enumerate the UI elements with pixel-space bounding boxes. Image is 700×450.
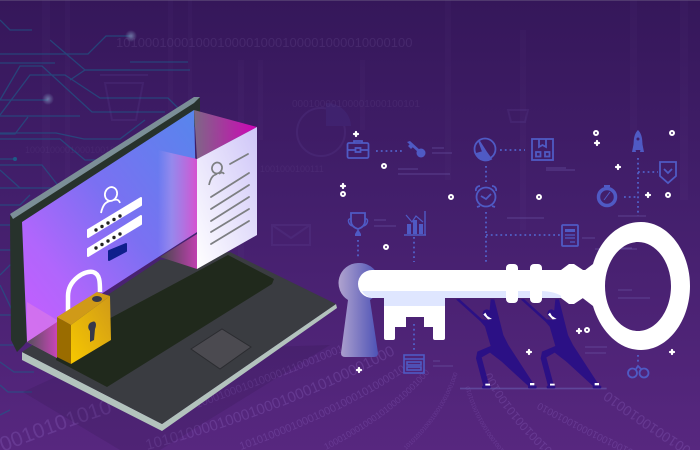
icon network [341, 130, 676, 378]
person 1 [456, 299, 537, 388]
lock cylinder [92, 296, 102, 302]
icon: binoculars [628, 366, 648, 378]
login user icon [101, 185, 120, 213]
binary data streams: 1000100010100001110001000111001 [198, 346, 342, 408]
dotted connectors [358, 150, 658, 363]
key bit [384, 298, 445, 340]
document text lines [211, 154, 249, 244]
screen glow [158, 150, 197, 257]
icon: box [532, 139, 553, 160]
lid top edge [10, 97, 200, 219]
key collars [506, 264, 518, 303]
key diamond neck [561, 264, 596, 304]
keyhole [339, 263, 380, 357]
lock front [71, 296, 111, 364]
icon: bar chart [404, 211, 426, 235]
icon: pie chart [474, 138, 496, 160]
faint top binary strings: 010 [205, 123, 258, 159]
icon: key [407, 141, 426, 158]
circuit nodes [13, 30, 137, 161]
faint top binary strings [25, 35, 420, 174]
icon: stopwatch [598, 186, 616, 206]
plus sparkles [341, 132, 674, 372]
laptop lid frame [10, 97, 200, 352]
keyhole [88, 322, 96, 342]
laptop [10, 97, 337, 450]
icon: browser [404, 355, 424, 373]
login form [88, 185, 141, 260]
username field [88, 198, 141, 237]
document user icon [209, 161, 224, 185]
icon: trophy [348, 213, 368, 236]
shackle [68, 272, 100, 317]
faint top binary strings: 1001000100111 [260, 164, 324, 174]
lock top [57, 292, 110, 325]
screen [22, 110, 197, 342]
icon: alarm clock [476, 186, 496, 207]
binary data streams: 1000100010001010001000100010001 [324, 370, 428, 450]
ring dots [341, 131, 674, 332]
laptop shadow [23, 345, 330, 450]
icon: document [562, 225, 578, 246]
binary data streams: 10101010100010001000100010001010 [404, 372, 458, 450]
laptop base [22, 252, 336, 424]
padlock [57, 272, 111, 364]
lock side [57, 317, 71, 364]
trackpad [191, 329, 251, 369]
icon: shield [660, 162, 676, 183]
faint vertical light bars [42, 0, 688, 300]
icon: rocket [632, 130, 644, 152]
password field [88, 216, 141, 256]
person 2 [521, 299, 601, 388]
faint background icons [100, 75, 528, 245]
icon: briefcase [348, 141, 368, 158]
faint top binary strings: 00010000100001000100101 [292, 99, 420, 110]
login button [109, 244, 126, 260]
ground shadow [460, 388, 607, 389]
people pushing the key [456, 299, 607, 389]
password dots [94, 214, 122, 250]
key ring [580, 222, 690, 350]
faint top binary strings: 10100010001000100001000100001000010000100 [116, 35, 412, 50]
faint label dashes [374, 148, 650, 366]
circuit lines [0, 20, 190, 415]
top fold [194, 110, 257, 159]
key shaft [358, 270, 572, 298]
floating document [197, 127, 257, 269]
giant key [358, 222, 690, 350]
laptop base edge [22, 304, 337, 431]
binary data streams: 100100010001010010101001 [466, 386, 504, 450]
lower left fold [27, 302, 57, 358]
bottom fold [160, 234, 197, 269]
faint top binary strings: 1000100001000100100 [25, 145, 120, 155]
keyboard [56, 255, 274, 387]
